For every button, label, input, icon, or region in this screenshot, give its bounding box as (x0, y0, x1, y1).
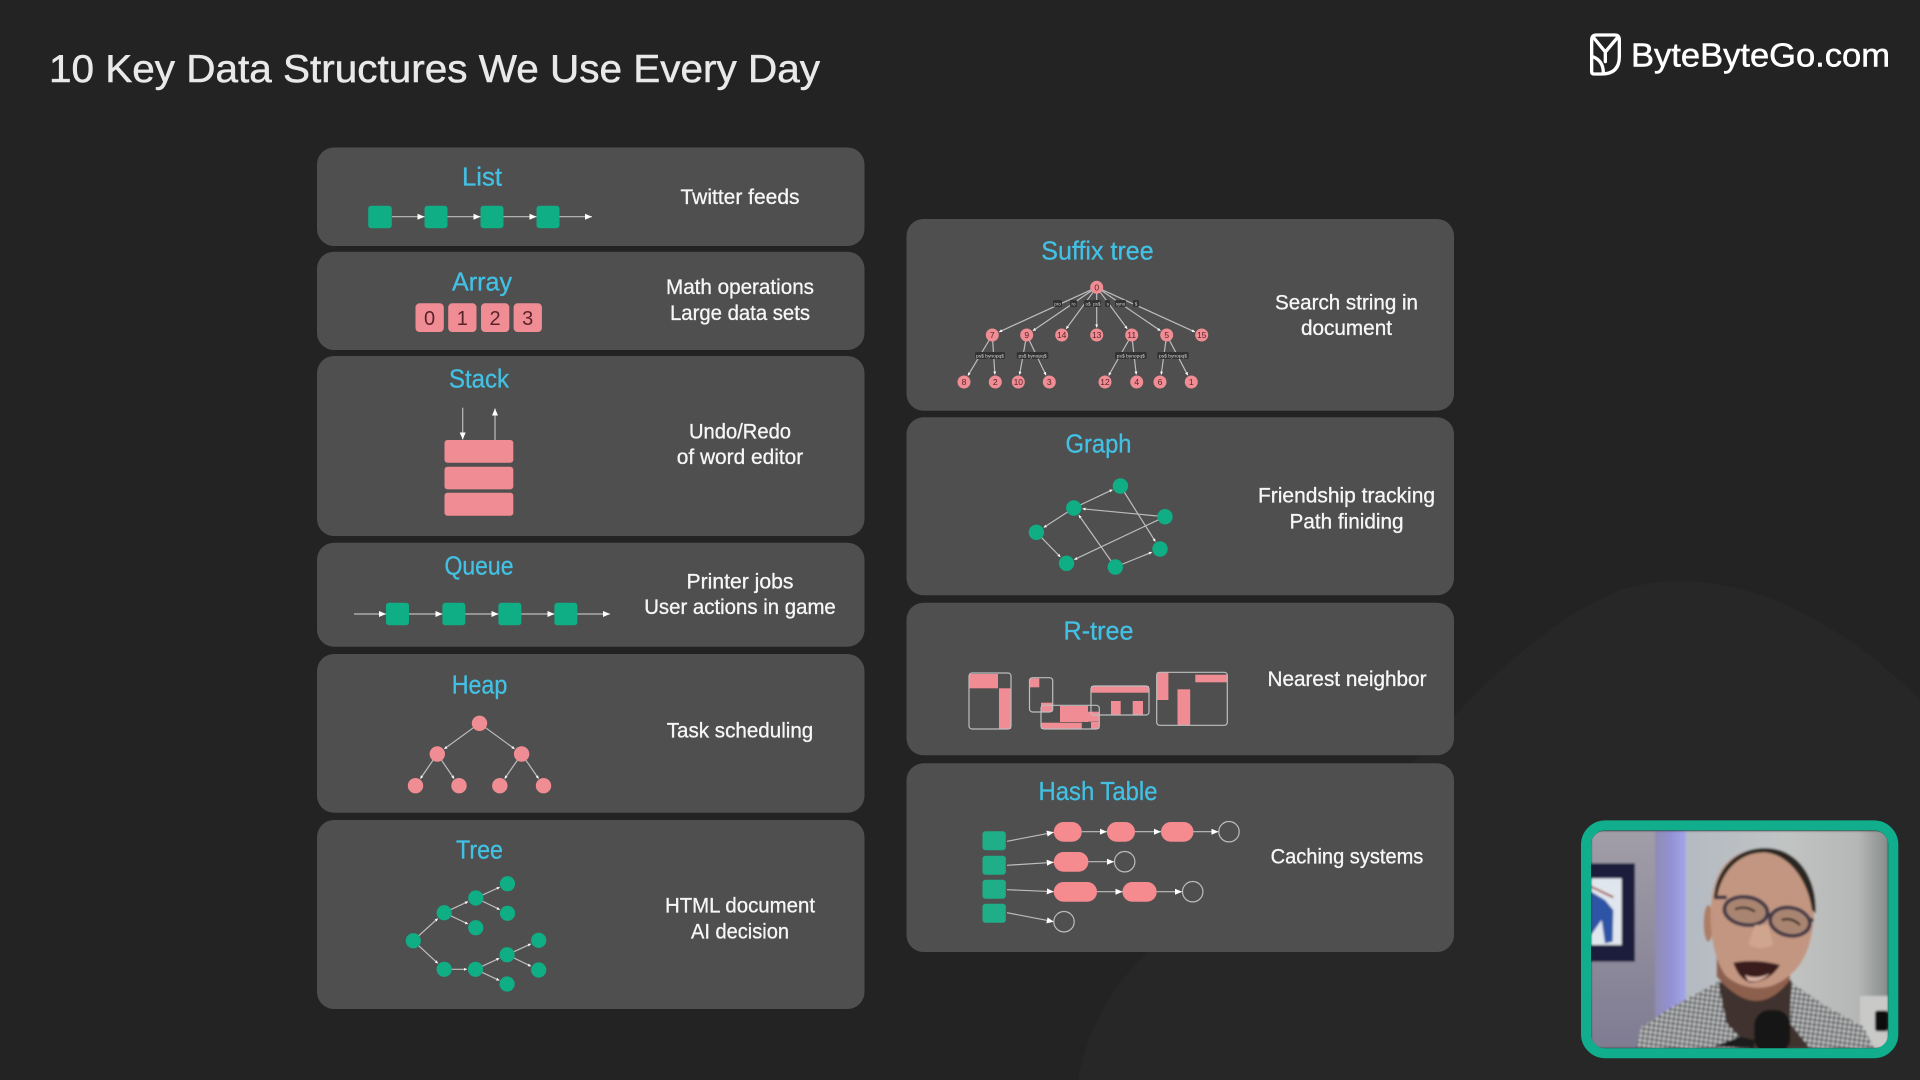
use case: Graph: Friendship tracking (1258, 485, 1435, 508)
diagram: suffix tree: 1 (1189, 377, 1194, 387)
diagram: suffix tree: 6 (1158, 377, 1163, 387)
use case: Queue: User actions in game (644, 596, 836, 619)
diagram: suffix tree: 5 (1164, 330, 1169, 340)
heading: Stack: Stack (449, 363, 510, 393)
panel: List (317, 148, 864, 246)
use case: Stack: of word editor (677, 446, 803, 469)
diagram: suffix tree: 13 (1092, 330, 1102, 340)
diagram: hash table (982, 822, 1239, 932)
heading: Tree: Tree (456, 834, 503, 864)
diagram: suffix tree: 14 (1057, 330, 1067, 340)
use case: Tree: AI decision (691, 920, 789, 943)
heading: Hash Table: Hash Table (1038, 776, 1158, 806)
diagram: suffix tree: 15 (1197, 330, 1207, 340)
diagram: suffix tree: 9 (1024, 330, 1029, 340)
diagram: suffix tree: 8 (962, 377, 967, 387)
use case: Array: Large data sets (670, 302, 810, 325)
use case: Tree (665, 895, 815, 943)
heading: Graph: Graph (1066, 429, 1132, 459)
diagram: graph (1029, 478, 1173, 575)
heading: Heap: Heap (452, 669, 507, 699)
use case: Hash Table: Caching systems (1271, 845, 1423, 868)
panel: R-tree (906, 603, 1454, 755)
icon: ByteByteGo shield (1592, 35, 1619, 74)
diagram: array cells: 2 (490, 308, 501, 330)
video border (1586, 825, 1893, 1053)
diagram: suffix tree: ps$ bynopq$ (1018, 353, 1047, 358)
use case: Queue (644, 570, 836, 619)
panel: Queue (317, 543, 864, 647)
diagram: array cells: 0 (424, 308, 435, 330)
use case: Tree: HTML document (665, 895, 815, 918)
use case: Suffix tree (1275, 291, 1418, 340)
diagram: linked list (368, 206, 592, 228)
diagram: suffix tree: ps$ bynopq$ (1117, 353, 1145, 358)
diagram: R-tree rectangles (969, 672, 1227, 729)
heading: Suffix tree: Suffix tree (1041, 235, 1154, 265)
panel: Graph (906, 417, 1454, 595)
diagram: suffix tree: s (1107, 301, 1110, 306)
diagram: suffix tree: o$ (1085, 301, 1091, 306)
use case: Queue: Printer jobs (686, 570, 794, 593)
panel: Stack (317, 356, 864, 536)
panel: Array (317, 252, 864, 350)
diagram: tree (406, 876, 546, 992)
diagram: suffix tree: syno (1116, 301, 1126, 306)
diagram: heap tree (408, 716, 551, 793)
use case: List: Twitter feeds (680, 186, 800, 209)
diagram: suffix tree: ro (1071, 301, 1076, 306)
diagram: suffix tree: ps$ (1093, 301, 1101, 306)
logo wordmark: ByteByteGo.com (1631, 36, 1890, 74)
use case: Heap: Task scheduling (667, 720, 813, 743)
use case: Graph: Path finiding (1290, 510, 1404, 533)
diagram: suffix tree: 4 (1134, 377, 1139, 387)
panel: Tree (317, 820, 864, 1009)
use case: Array (666, 276, 814, 325)
diagram: suffix tree: ps$ bynopq$ (976, 353, 1005, 358)
diagram: stack (444, 408, 513, 516)
heading: Array: Array (452, 266, 512, 296)
diagram: suffix tree: 11 (1127, 330, 1136, 340)
heading: R-tree: R-tree (1064, 615, 1134, 645)
diagram: suffix tree: 7 (990, 330, 995, 340)
diagram: suffix tree: 10 (1014, 377, 1023, 387)
diagram: suffix tree: ps$ bynopq$ (1159, 353, 1188, 358)
diagram: suffix tree (958, 281, 1208, 388)
diagram: suffix tree: $ (1135, 301, 1138, 306)
use case: Suffix tree: Search string in (1275, 291, 1418, 314)
title: 10 Key Data Structures We Use Every Day (49, 48, 821, 91)
diagram: suffix tree: 2 (993, 377, 998, 387)
diagram: array cells (416, 303, 542, 332)
use case: Stack: Undo/Redo (689, 420, 791, 443)
diagram: queue (354, 603, 610, 625)
diagram: suffix tree: 12 (1100, 377, 1110, 387)
diagram: array cells: 1 (457, 308, 468, 330)
panel: Heap (317, 654, 864, 813)
diagram: suffix tree: 0 (1094, 282, 1099, 292)
panel: Suffix tree (906, 219, 1454, 411)
logo: ByteByteGo.com (1592, 35, 1890, 74)
diagram: suffix tree: pro (1054, 301, 1061, 306)
heading: Queue: Queue (444, 550, 514, 580)
heading: List: List (462, 162, 503, 192)
use case: Suffix tree: document (1301, 317, 1392, 340)
diagram: suffix tree: 3 (1047, 377, 1052, 387)
use case: Graph (1258, 485, 1435, 533)
diagram: array cells: 3 (522, 308, 533, 330)
panel: Hash Table (906, 763, 1454, 952)
use case: R-tree: Nearest neighbor (1268, 668, 1426, 691)
presenter video frame (1586, 825, 1893, 1053)
use case: Stack (677, 420, 803, 469)
use case: Array: Math operations (666, 276, 814, 299)
